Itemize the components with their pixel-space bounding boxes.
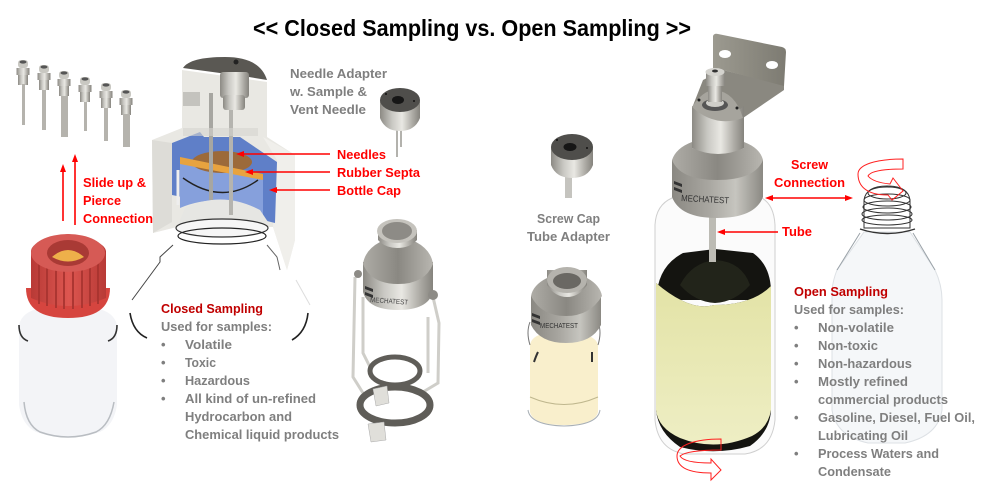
glass	[655, 198, 775, 454]
text block: open sampling: •	[794, 374, 799, 389]
callout: screw connection: Screw	[791, 157, 829, 172]
text block: open sampling: Non-toxic	[818, 338, 878, 353]
arrow: rotate clear bottle	[858, 159, 903, 200]
label: needle adapter: Vent Needle	[290, 102, 366, 117]
label: slide up and pierce connection: Pierce	[83, 193, 121, 208]
callout: tube: Tube	[782, 224, 812, 239]
text block: open sampling: Non-volatile	[818, 320, 894, 335]
text block: open sampling: •	[794, 446, 799, 461]
label: needle adapter: w. Sample &	[289, 84, 367, 99]
text block: closed sampling: •	[161, 337, 166, 352]
callout: screw connection	[765, 157, 853, 201]
label: slide up and pierce connection: Connection	[83, 211, 153, 226]
icon: bottle with red cap	[19, 234, 117, 438]
text block: open sampling: Open Sampling	[794, 284, 888, 299]
neck ring	[178, 199, 270, 225]
text block: open sampling: Non-hazardous	[818, 356, 912, 371]
fitting	[702, 99, 728, 111]
liquid	[657, 249, 771, 300]
blue cap	[172, 132, 277, 223]
text block: closed sampling: Used for samples:	[161, 319, 272, 334]
text block: closed sampling: Chemical liquid products	[185, 427, 339, 442]
label: needle adapter: Needle Adapter	[290, 66, 387, 81]
outer shell	[152, 70, 295, 270]
text block: open sampling: Used for samples:	[794, 302, 904, 317]
text block: open sampling: commercial products	[818, 392, 948, 407]
icon: large bottle with bracket and adapter	[655, 34, 786, 454]
icon: small vial with adapter: MECHATEST	[540, 323, 579, 330]
text block: closed sampling: Hazardous	[185, 373, 250, 388]
cutaway: needle adapter on bottle cap	[130, 57, 310, 340]
glass bottle outline	[130, 245, 310, 340]
text block: closed sampling: •	[161, 373, 166, 388]
bracket	[692, 70, 784, 121]
cylinder	[692, 106, 744, 155]
arrows and labels: needles, rubber septa, bottle cap: Bottle Cap	[337, 183, 401, 198]
text block: open sampling: Gasoline, Diesel, Fuel Oil,	[818, 410, 975, 425]
text block: open sampling: •	[794, 356, 799, 371]
text block: closed sampling: All kind of un-refined	[185, 391, 316, 406]
text block: closed sampling	[161, 301, 339, 442]
inner metal parts	[220, 72, 249, 98]
title: << Closed Sampling vs. Open Sampling >>	[253, 15, 691, 41]
text block: open sampling: •	[794, 320, 799, 335]
arrows: slide up	[60, 154, 78, 225]
label: screw cap tube adapter	[527, 211, 610, 244]
text block: closed sampling: Toxic	[185, 355, 216, 370]
text block: closed sampling: Closed Sampling	[161, 301, 263, 316]
callout: tube	[717, 224, 812, 239]
septa	[180, 157, 263, 180]
icon: small vial with adapter	[528, 267, 602, 426]
arrows and labels: needles, rubber septa, bottle cap: Needles	[337, 147, 386, 162]
text block: closed sampling: •	[161, 391, 166, 406]
label: screw cap tube adapter: Tube Adapter	[527, 229, 610, 244]
text block: open sampling: •	[794, 338, 799, 353]
text block: closed sampling: Volatile	[185, 337, 232, 352]
text block: closed sampling: •	[161, 355, 166, 370]
text block: open sampling: Condensate	[818, 464, 891, 479]
label: needle adapter	[289, 66, 387, 117]
icon: closed adapter with hanger: MECHATEST	[370, 297, 409, 307]
tube	[709, 212, 716, 262]
text block: open sampling: •	[794, 410, 799, 425]
label: screw cap tube adapter: Screw Cap	[537, 211, 600, 226]
text block: open sampling	[794, 284, 975, 479]
text block: closed sampling: Hydrocarbon and	[185, 409, 292, 424]
arrow: rotate large bottle	[677, 439, 721, 480]
icon: closed adapter with hanger	[353, 219, 439, 442]
disc	[672, 160, 763, 218]
arrows and labels: needles, rubber septa, bottle cap	[236, 147, 421, 198]
icon: needle adapter	[380, 88, 420, 157]
label: slide up and pierce connection	[83, 175, 153, 226]
text block: open sampling: Process Waters and	[818, 446, 939, 461]
arrows and labels: needles, rubber septa, bottle cap: Rubber Septa	[337, 165, 421, 180]
icon: large bottle with bracket and adapter: MECHATEST	[681, 193, 730, 206]
label: slide up and pierce connection: Slide up &	[83, 175, 146, 190]
icon: screw cap tube adapter	[551, 134, 593, 198]
needles set	[16, 60, 132, 147]
icon: clear glass bottle	[832, 186, 942, 443]
callout: screw connection: Connection	[774, 175, 845, 190]
text block: open sampling: Mostly refined	[818, 374, 908, 389]
text block: open sampling: Lubricating Oil	[818, 428, 908, 443]
